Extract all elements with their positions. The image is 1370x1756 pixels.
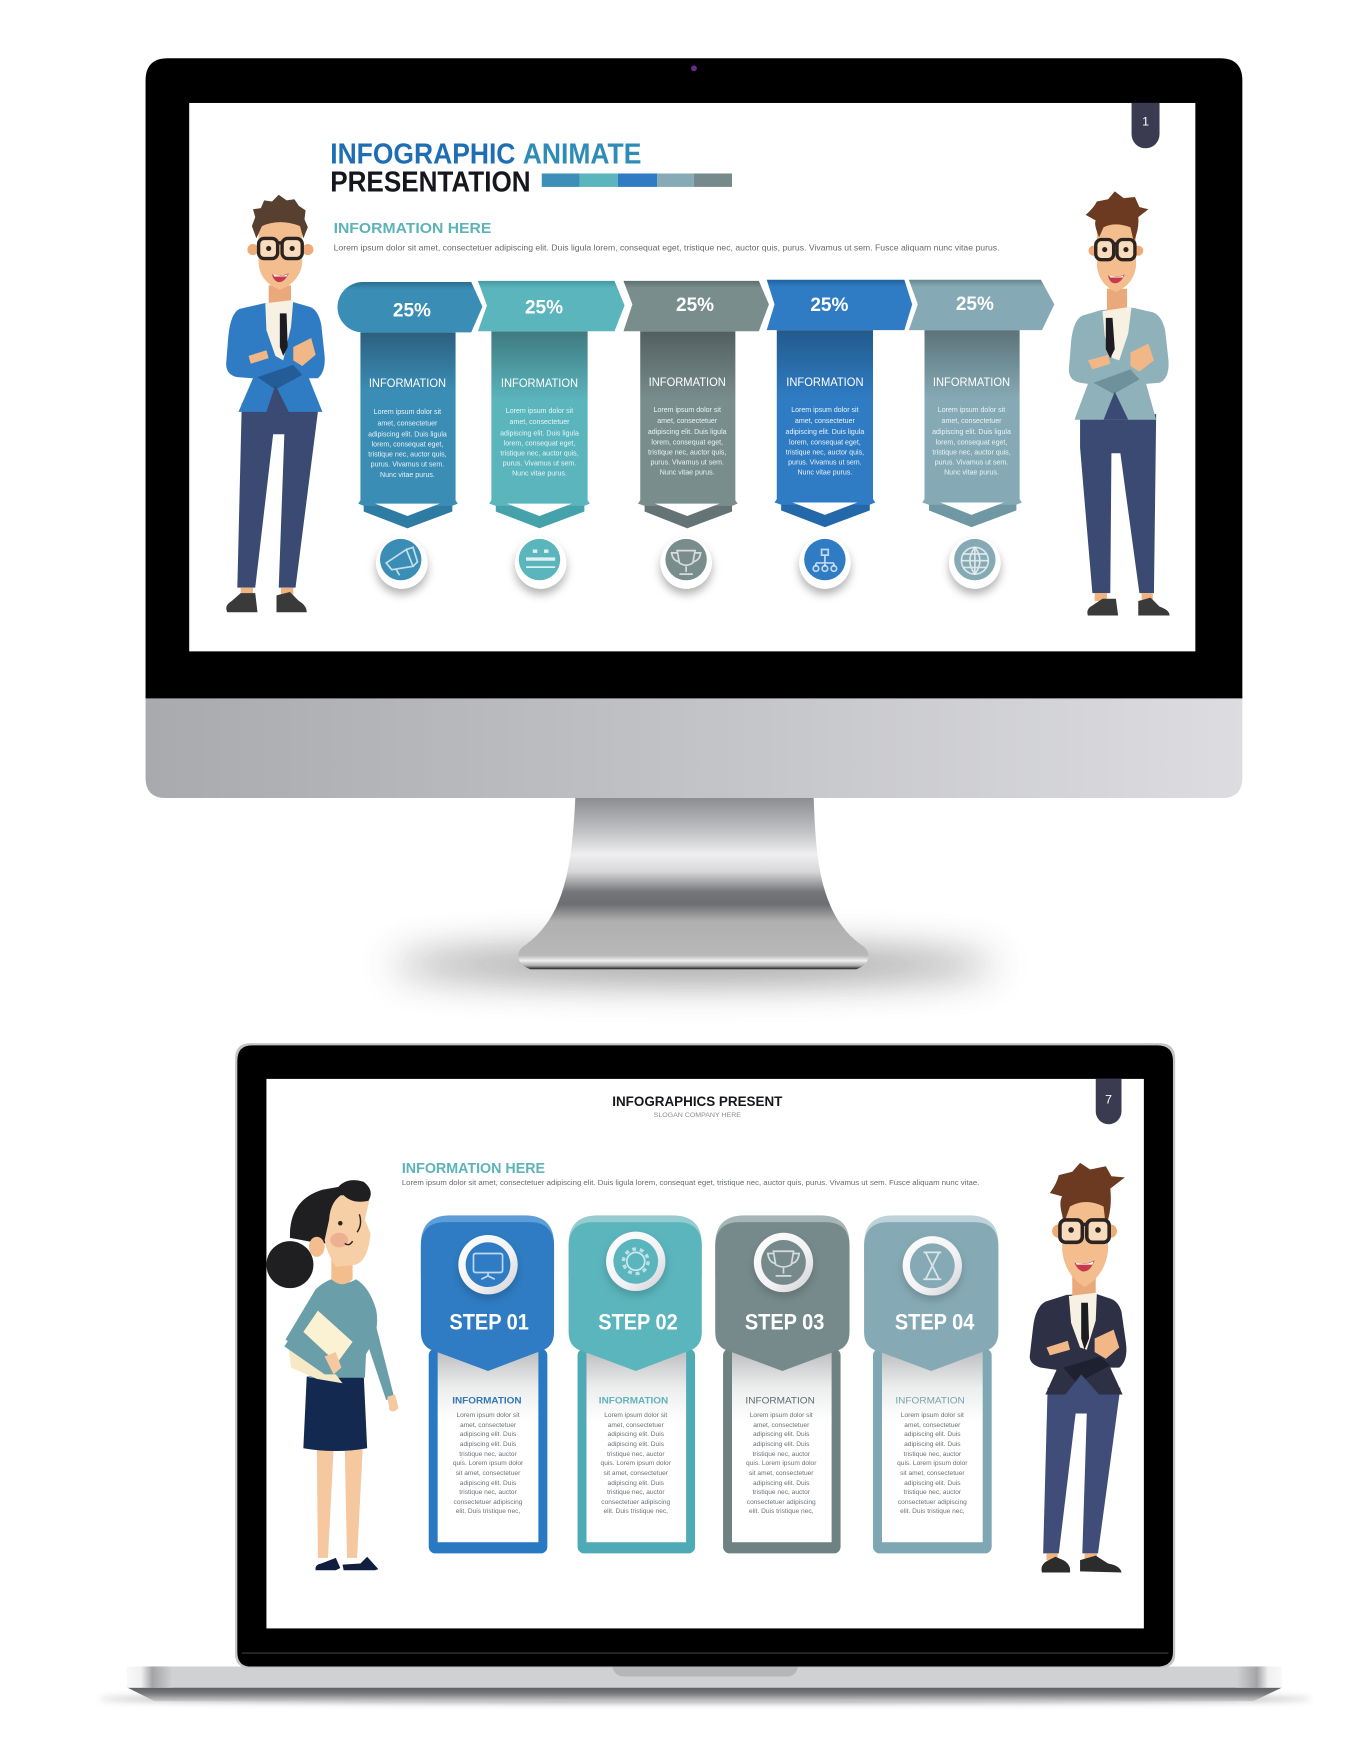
arrow 1 [337, 282, 482, 332]
step card 3: adipiscing elit. Duis [753, 1441, 810, 1448]
card frame 2 [578, 1349, 695, 1553]
character: man in blue jacket [226, 195, 325, 612]
step card 2: elit. Duis tristique nec, [604, 1508, 668, 1515]
colour strip [542, 173, 732, 187]
column 4: adipiscing elit. Duis ligula [786, 429, 864, 436]
step card 4: Lorem ipsum dolor sit [901, 1412, 964, 1419]
step card 2: adipiscing elit. Duis [608, 1431, 665, 1438]
slide 1 title: INFOGRAPHIC ANIMATE [330, 138, 641, 170]
card frame 1 [429, 1349, 547, 1553]
step card 1: adipiscing elit. Duis [460, 1431, 517, 1438]
column 5: lorem, consequat eget, [936, 439, 1007, 446]
slide 2 page tab: 7 [1105, 1093, 1112, 1107]
webcam [691, 65, 697, 71]
slide 2 information heading: INFORMATION HERE [402, 1161, 545, 1177]
monitor shadow [392, 949, 996, 980]
step card 3: elit. Duis tristique nec, [749, 1508, 814, 1515]
step card 4: INFORMATION [895, 1395, 965, 1406]
column 4: Lorem ipsum dolor sit [791, 407, 859, 414]
column 5: INFORMATION [933, 376, 1010, 389]
monitor screen [189, 103, 1195, 651]
step card 4: elit. Duis tristique nec, [900, 1508, 965, 1515]
column 4: purus. Vivamus ut sem. [788, 459, 862, 466]
column 3: purus. Vivamus ut sem. [650, 459, 724, 466]
column 3: tristique nec, auctor quis, [648, 449, 726, 456]
laptop screen [266, 1079, 1144, 1628]
column 2: adipiscing elit. Duis ligula [500, 430, 579, 437]
step card 1 [421, 1215, 554, 1553]
column 2: lorem, consequat eget, [504, 440, 575, 447]
laptop lid outer [235, 1043, 1175, 1668]
step card 2: INFORMATION [599, 1395, 668, 1406]
step card 2 [569, 1215, 702, 1553]
desktop monitor mockup [146, 58, 1242, 980]
slide 1 title [330, 138, 641, 198]
step card 3: adipiscing elit. Duis [753, 1431, 810, 1438]
monitor stand [518, 798, 869, 969]
slide 2 intro text: Lorem ipsum dolor sit amet, consectetuer adipiscing elit. Duis ligula lorem, consequat eget, tristique nec, auctor quis, purus. Vivamus ut sem. Fusce aliquam nunc vitae. [402, 1179, 979, 1187]
column 5: Lorem ipsum dolor sit [938, 407, 1005, 414]
step card 3: quis. Lorem ipsum dolor [746, 1460, 817, 1467]
column 4: tristique nec, auctor quis, [786, 449, 864, 456]
icon: data grid [515, 537, 566, 589]
step card 3: consectetuer adipiscing [747, 1499, 816, 1506]
ribbon body 2 [489, 331, 590, 528]
column 4: lorem, consequat eget, [789, 439, 861, 446]
monitor chin [146, 696, 1242, 798]
step card 2: tristique nec, auctor [607, 1489, 665, 1496]
column 3 [623, 281, 769, 589]
slide 1 [226, 103, 1170, 616]
column 1: lorem, consequat eget, [372, 442, 443, 449]
step card 3: adipiscing elit. Duis [753, 1480, 810, 1487]
card header 1 [421, 1215, 554, 1371]
step card 1: adipiscing elit. Duis [460, 1480, 517, 1487]
slide 2 title: INFOGRAPHICS PRESENT [612, 1094, 783, 1109]
step card 1: Lorem ipsum dolor sit [457, 1412, 520, 1419]
icon: globe [949, 537, 1001, 589]
step card 2: adipiscing elit. Duis [608, 1441, 665, 1448]
step card 3: Lorem ipsum dolor sit [750, 1412, 813, 1419]
information heading: INFORMATION HERE [334, 220, 491, 237]
arrow 4 [767, 280, 912, 330]
icon: gear [606, 1232, 665, 1291]
column 1: 25% [393, 301, 431, 322]
column 5: tristique nec, auctor quis, [932, 449, 1011, 456]
column 5: purus. Vivamus ut sem. [935, 459, 1008, 466]
intro text: Lorem ipsum dolor sit amet, consectetuer adipiscing elit. Duis ligula lorem, consequat eget, tristique nec, auctor quis, purus. Vivamus ut sem. Fusce aliquam nunc vitae purus. [334, 244, 999, 253]
slide 1 page tab: 1 [1142, 114, 1149, 128]
column 2: Nunc vitae purus. [512, 471, 567, 478]
ribbon body 5 [922, 330, 1022, 527]
column 1: Nunc vitae purus. [380, 472, 435, 479]
step card 4: amet, consectetuer [904, 1422, 961, 1429]
ribbon body 4 [775, 330, 875, 527]
column 2: amet, consectetuer [510, 419, 570, 426]
step card 2: quis. Lorem ipsum dolor [601, 1460, 672, 1467]
laptop mockup [99, 1043, 1312, 1702]
card header 4 [864, 1215, 998, 1371]
step card 4: STEP 04 [895, 1310, 975, 1335]
column 2 [478, 281, 625, 589]
step card 3: sit amet, consectetuer [749, 1470, 814, 1477]
column 5: 25% [956, 294, 994, 315]
step card 1: consectetuer adipiscing [454, 1499, 523, 1506]
icon: monitor [458, 1235, 518, 1294]
column 3: 25% [676, 295, 714, 316]
step card 4: tristique nec, auctor [904, 1489, 962, 1496]
column 5: adipiscing elit. Duis ligula [932, 429, 1011, 436]
arrow 3 [623, 281, 769, 331]
step card 2: Lorem ipsum dolor sit [604, 1412, 667, 1419]
step card 2: adipiscing elit. Duis [608, 1480, 665, 1487]
column 5 [909, 280, 1054, 589]
step card 2: tristique nec, auctor [607, 1451, 665, 1458]
column 4: amet, consectetuer [795, 418, 856, 425]
column 2: purus. Vivamus ut sem. [503, 461, 576, 468]
card frame 3 [723, 1349, 841, 1553]
icon: trophy [660, 537, 712, 589]
laptop bezel [237, 1045, 1173, 1666]
step card 3: STEP 03 [745, 1310, 824, 1335]
column 3: amet, consectetuer [657, 418, 718, 425]
column 1: Lorem ipsum dolor sit [374, 409, 441, 416]
ribbon body 1 [358, 332, 458, 528]
column 2: tristique nec, auctor quis, [500, 451, 579, 458]
column 5: Nunc vitae purus. [944, 470, 999, 477]
laptop base shadow [99, 1696, 1312, 1702]
icon: megaphone [376, 537, 428, 589]
column 2: 25% [525, 297, 563, 318]
card header 2 [569, 1215, 702, 1371]
step card 4: sit amet, consectetuer [900, 1470, 965, 1477]
step card 1: STEP 01 [449, 1310, 529, 1335]
column 1 [337, 282, 482, 589]
step card 3: INFORMATION [745, 1395, 815, 1406]
column 4: Nunc vitae purus. [797, 470, 852, 477]
icon: hourglass [903, 1236, 962, 1295]
step card 1: adipiscing elit. Duis [460, 1441, 517, 1448]
column 2: INFORMATION [501, 377, 578, 390]
slide 2 page tab [1096, 1079, 1121, 1124]
step card 4: adipiscing elit. Duis [904, 1441, 961, 1448]
slide 1 page tab [1132, 103, 1160, 148]
step card 1: INFORMATION [452, 1395, 522, 1406]
character: man in light jacket [1069, 191, 1170, 616]
icon: trophy [754, 1233, 813, 1292]
column 1: amet, consectetuer [377, 420, 438, 427]
step card 1: tristique nec, auctor [459, 1489, 518, 1496]
slide 2 [266, 1079, 1126, 1572]
step card 4: adipiscing elit. Duis [904, 1431, 961, 1438]
step card 1: elit. Duis tristique nec, [456, 1508, 520, 1515]
step card 2: STEP 02 [598, 1310, 678, 1335]
column 4: INFORMATION [786, 376, 864, 389]
monitor bezel [146, 58, 1242, 698]
arrow 2 [478, 281, 625, 331]
step card 3: amet, consectetuer [753, 1422, 810, 1429]
column 3: Lorem ipsum dolor sit [654, 407, 721, 414]
step card 3: tristique nec, auctor [752, 1489, 811, 1496]
column 1: tristique nec, auctor quis, [368, 452, 447, 459]
column 3: INFORMATION [649, 376, 726, 389]
step card 1: quis. Lorem ipsum dolor [453, 1460, 524, 1467]
column 4 [767, 280, 912, 589]
column 4: 25% [810, 295, 848, 316]
step card 3: tristique nec, auctor [752, 1451, 811, 1458]
column 3: lorem, consequat eget, [651, 439, 723, 446]
icon: network [799, 537, 851, 589]
column 2: Lorem ipsum dolor sit [506, 408, 573, 415]
card frame 4 [873, 1349, 992, 1553]
laptop base top [128, 1666, 1282, 1688]
column 5: amet, consectetuer [942, 418, 1002, 425]
step card 1: amet, consectetuer [460, 1422, 517, 1429]
step card 4: tristique nec, auctor [904, 1451, 962, 1458]
step card 1: tristique nec, auctor [459, 1451, 518, 1458]
column 1: purus. Vivamus ut sem. [371, 462, 444, 469]
slide 1 title: PRESENTATION [330, 166, 531, 198]
step card 4: adipiscing elit. Duis [904, 1480, 961, 1487]
column 3: adipiscing elit. Duis ligula [648, 429, 727, 436]
laptop base lower [128, 1685, 1282, 1701]
card header 3 [715, 1215, 850, 1371]
column 1: adipiscing elit. Duis ligula [368, 431, 447, 438]
character: woman with papers [266, 1180, 398, 1570]
column 1: INFORMATION [369, 377, 446, 390]
step card 2: sit amet, consectetuer [603, 1470, 669, 1477]
step card 4 [864, 1215, 998, 1553]
step card 2: consectetuer adipiscing [601, 1499, 671, 1506]
laptop notch [612, 1666, 798, 1677]
slide 2 slogan: SLOGAN COMPANY HERE [654, 1112, 742, 1119]
arrow 5 [909, 280, 1054, 330]
ribbon body 3 [638, 331, 738, 528]
step card 3 [715, 1215, 850, 1553]
column 3: Nunc vitae purus. [660, 470, 715, 477]
step card 4: quis. Lorem ipsum dolor [897, 1460, 968, 1467]
step card 2: amet, consectetuer [608, 1422, 665, 1429]
character: man in dark jacket [1030, 1163, 1126, 1572]
step card 1: sit amet, consectetuer [456, 1470, 521, 1477]
step card 4: consectetuer adipiscing [898, 1499, 967, 1506]
